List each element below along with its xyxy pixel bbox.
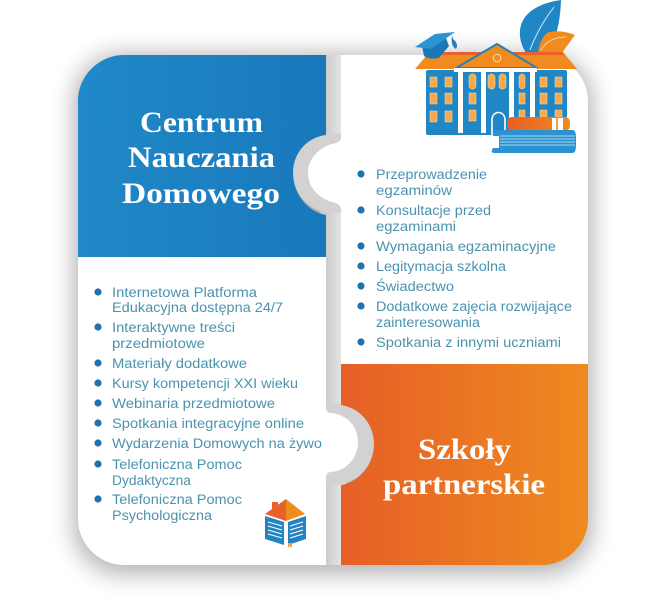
windows <box>430 74 562 122</box>
list: platform resources: Spotkania integracyjne online <box>112 416 304 431</box>
list: school services: Przeprowadzenie <box>376 167 487 182</box>
panel: Centrum Nauczania Domowego <box>78 55 358 565</box>
icon: book house <box>265 499 306 548</box>
list: platform resources: Webinaria przedmiotowe <box>112 396 275 411</box>
blue header <box>78 55 326 257</box>
heading: Centrum Nauczania Domowego: Centrum <box>140 106 263 139</box>
heading: Szkoły partnerskie <box>383 433 545 501</box>
graduation cap <box>422 38 449 59</box>
building walls <box>426 70 567 135</box>
heading: Centrum Nauczania Domowego: Domowego <box>122 177 280 210</box>
heading: Szkoły partnerskie: partnerskie <box>383 468 545 501</box>
list: platform resources: Psychologiczna <box>112 508 213 523</box>
list: school services: zainteresowania <box>376 315 481 330</box>
list: platform resources: Interaktywne treści <box>112 320 235 335</box>
list: platform resources: Telefoniczna Pomoc <box>112 492 242 507</box>
white list panel <box>308 55 588 364</box>
list: school services: egzaminów <box>376 183 452 198</box>
heading: Centrum Nauczania Domowego: Nauczania <box>128 141 275 174</box>
list: school services: Spotkania z innymi uczniami <box>376 335 561 350</box>
icon: blue leaf <box>520 0 561 53</box>
roof <box>415 52 577 69</box>
list: platform resources: Wydarzenia Domowych na żywo <box>112 436 322 451</box>
list: platform resources: Dydaktyczna <box>112 473 191 488</box>
list: platform resources: Telefoniczna Pomoc <box>112 457 242 472</box>
white columns <box>454 68 537 133</box>
white list panel <box>78 257 358 565</box>
heading: Centrum Nauczania Domowego <box>122 106 280 210</box>
list: platform resources: Edukacyjna dostępna 24/7 <box>112 300 283 315</box>
orange book <box>507 117 570 131</box>
list: school services: egzaminami <box>376 219 456 234</box>
list: platform resources: Materiały dodatkowe <box>112 356 247 371</box>
list: school services: Świadectwo <box>376 279 454 294</box>
card shadow <box>74 54 592 574</box>
list: platform resources <box>94 285 322 523</box>
list: school services: Konsultacje przed <box>376 203 491 218</box>
door <box>492 112 505 135</box>
icon: orange leaf <box>538 31 575 53</box>
list: school services: Legitymacja szkolna <box>376 259 507 274</box>
list: platform resources: Kursy kompetencji XXI wieku <box>112 376 298 391</box>
list: platform resources: Internetowa Platforma <box>112 285 258 300</box>
orange panel <box>341 364 588 565</box>
list: school services: Wymagania egzaminacyjne <box>376 239 556 254</box>
heading: Szkoły partnerskie: Szkoły <box>418 433 511 466</box>
list: platform resources: przedmiotowe <box>112 336 205 351</box>
pediment <box>456 44 537 68</box>
blue book <box>492 130 576 153</box>
card gap <box>292 55 374 565</box>
list: school services: Dodatkowe zajęcia rozwijające <box>376 299 572 314</box>
icon: school building with books <box>415 0 577 153</box>
panel: Szkoły partnerskie <box>308 55 588 565</box>
list: school services <box>357 167 572 350</box>
